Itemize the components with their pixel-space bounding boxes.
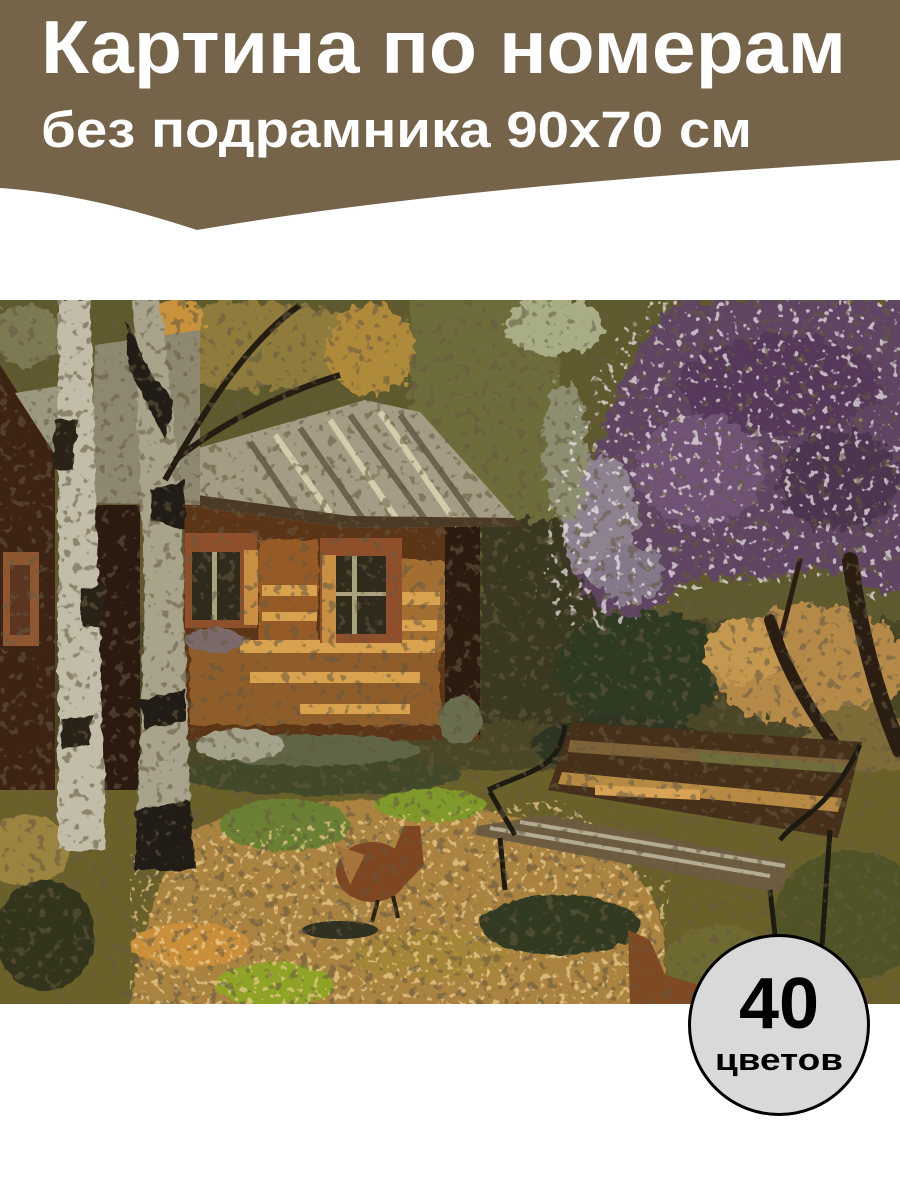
purple blossom tree (543, 300, 900, 616)
blossom tree trunks (770, 560, 900, 750)
grass flecks (130, 800, 670, 1004)
painting: country cabin with bench and chickens (0, 280, 900, 1010)
ground and grass (0, 770, 900, 1010)
left cabin wall (0, 365, 55, 790)
window right (320, 538, 402, 643)
roof (185, 400, 522, 528)
painterly dark speckle (0, 300, 900, 1004)
dark bushes (0, 717, 900, 990)
bench seat (476, 815, 790, 893)
branches (165, 305, 340, 480)
birch right (125, 300, 195, 870)
cabin wall (185, 505, 480, 740)
window left (185, 533, 258, 628)
title: Картина по номерам (41, 5, 846, 89)
birch left (52, 300, 106, 850)
cabin (15, 330, 522, 740)
shadow under chicken (302, 921, 378, 939)
header banner (0, 0, 900, 230)
log highlights (240, 585, 440, 714)
blossom flecks (535, 300, 900, 631)
badge number: 40 (739, 964, 819, 1044)
chicken corner (628, 930, 700, 1004)
dark corner logs (445, 525, 480, 735)
white flowers and bushes (185, 628, 482, 766)
bench back (548, 722, 862, 838)
dark gap (94, 505, 140, 790)
bench frame (488, 725, 860, 945)
badge label: цветов (715, 1042, 843, 1077)
left cabin window (3, 552, 39, 646)
chicken centre (335, 826, 424, 922)
background foliage (0, 280, 900, 785)
subtitle: без подрамника 90х70 см (41, 101, 752, 158)
birch trees (52, 300, 340, 870)
left roof (15, 386, 58, 452)
bench (476, 722, 862, 945)
badge: 40 colours (690, 936, 868, 1114)
